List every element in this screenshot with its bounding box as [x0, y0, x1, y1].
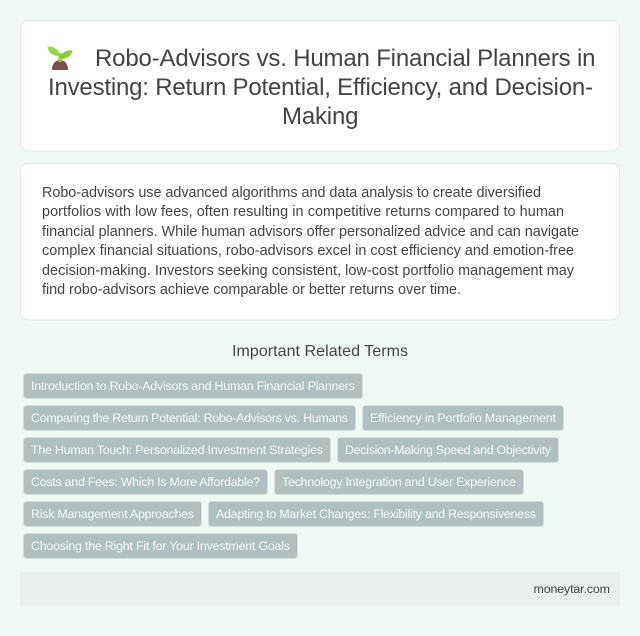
panel: summary card [20, 164, 620, 320]
tag: decision-making: Decision-Making Speed and Objectivity [345, 443, 552, 457]
tag: technology [274, 470, 524, 494]
summary text: decision-making. Investors seeking consistent, low-cost portfolio management may [42, 263, 575, 279]
tag: technology: Technology Integration and User Experience [282, 475, 516, 489]
icon: seedling [48, 46, 72, 70]
tag: return potential [24, 406, 356, 430]
title: Robo-Advisors vs. Human Financial Planners in [95, 45, 596, 72]
tag: choosing [24, 534, 298, 558]
summary text: Robo-advisors use advanced algorithms and data analysis to create diversified [42, 185, 541, 201]
tag: adapting: Adapting to Market Changes: Flexibility and Responsiveness [216, 507, 536, 521]
tag: adapting [208, 502, 544, 526]
footer: moneytar.com [534, 582, 610, 596]
tag: return potential: Comparing the Return Potential: Robo-Advisors vs. Humans [31, 411, 348, 425]
tag: risk management [24, 502, 202, 526]
summary text: find robo-advisors achieve comparable or better returns over time. [42, 282, 461, 298]
tag: human touch: The Human Touch: Personalized Investment Strategies [31, 443, 323, 457]
title: Making [282, 103, 358, 130]
tag: risk management: Risk Management Approaches [31, 507, 194, 521]
tag: costs and fees: Costs and Fees: Which Is More Affordable? [31, 475, 260, 489]
title: Investing: Return Potential, Efficiency, and Decision- [48, 74, 593, 101]
summary text [42, 185, 579, 298]
tag: introduction [24, 374, 362, 398]
tag: costs and fees [24, 470, 268, 494]
title [48, 45, 596, 130]
panel: title card [20, 20, 620, 151]
tag: introduction: Introduction to Robo-Advisors and Human Financial Planners [31, 379, 355, 393]
tag: choosing: Choosing the Right Fit for Your Investment Goals [31, 539, 290, 553]
related terms tags [24, 374, 564, 558]
footer [20, 572, 620, 606]
summary text: portfolios with low fees, often resulting in competitive returns compared to human [42, 204, 564, 220]
summary text: financial planners. While human advisors offer personalized advice and can navigate [42, 224, 579, 240]
tag: efficiency [362, 406, 564, 430]
tag: decision-making [338, 438, 558, 462]
summary text: complex financial situations, robo-advisors excel in cost efficiency and emotion-free [42, 243, 574, 259]
heading: important related terms: Important Related Terms [232, 343, 408, 360]
tag: efficiency: Efficiency in Portfolio Management [370, 411, 557, 425]
tag: human touch [24, 438, 330, 462]
